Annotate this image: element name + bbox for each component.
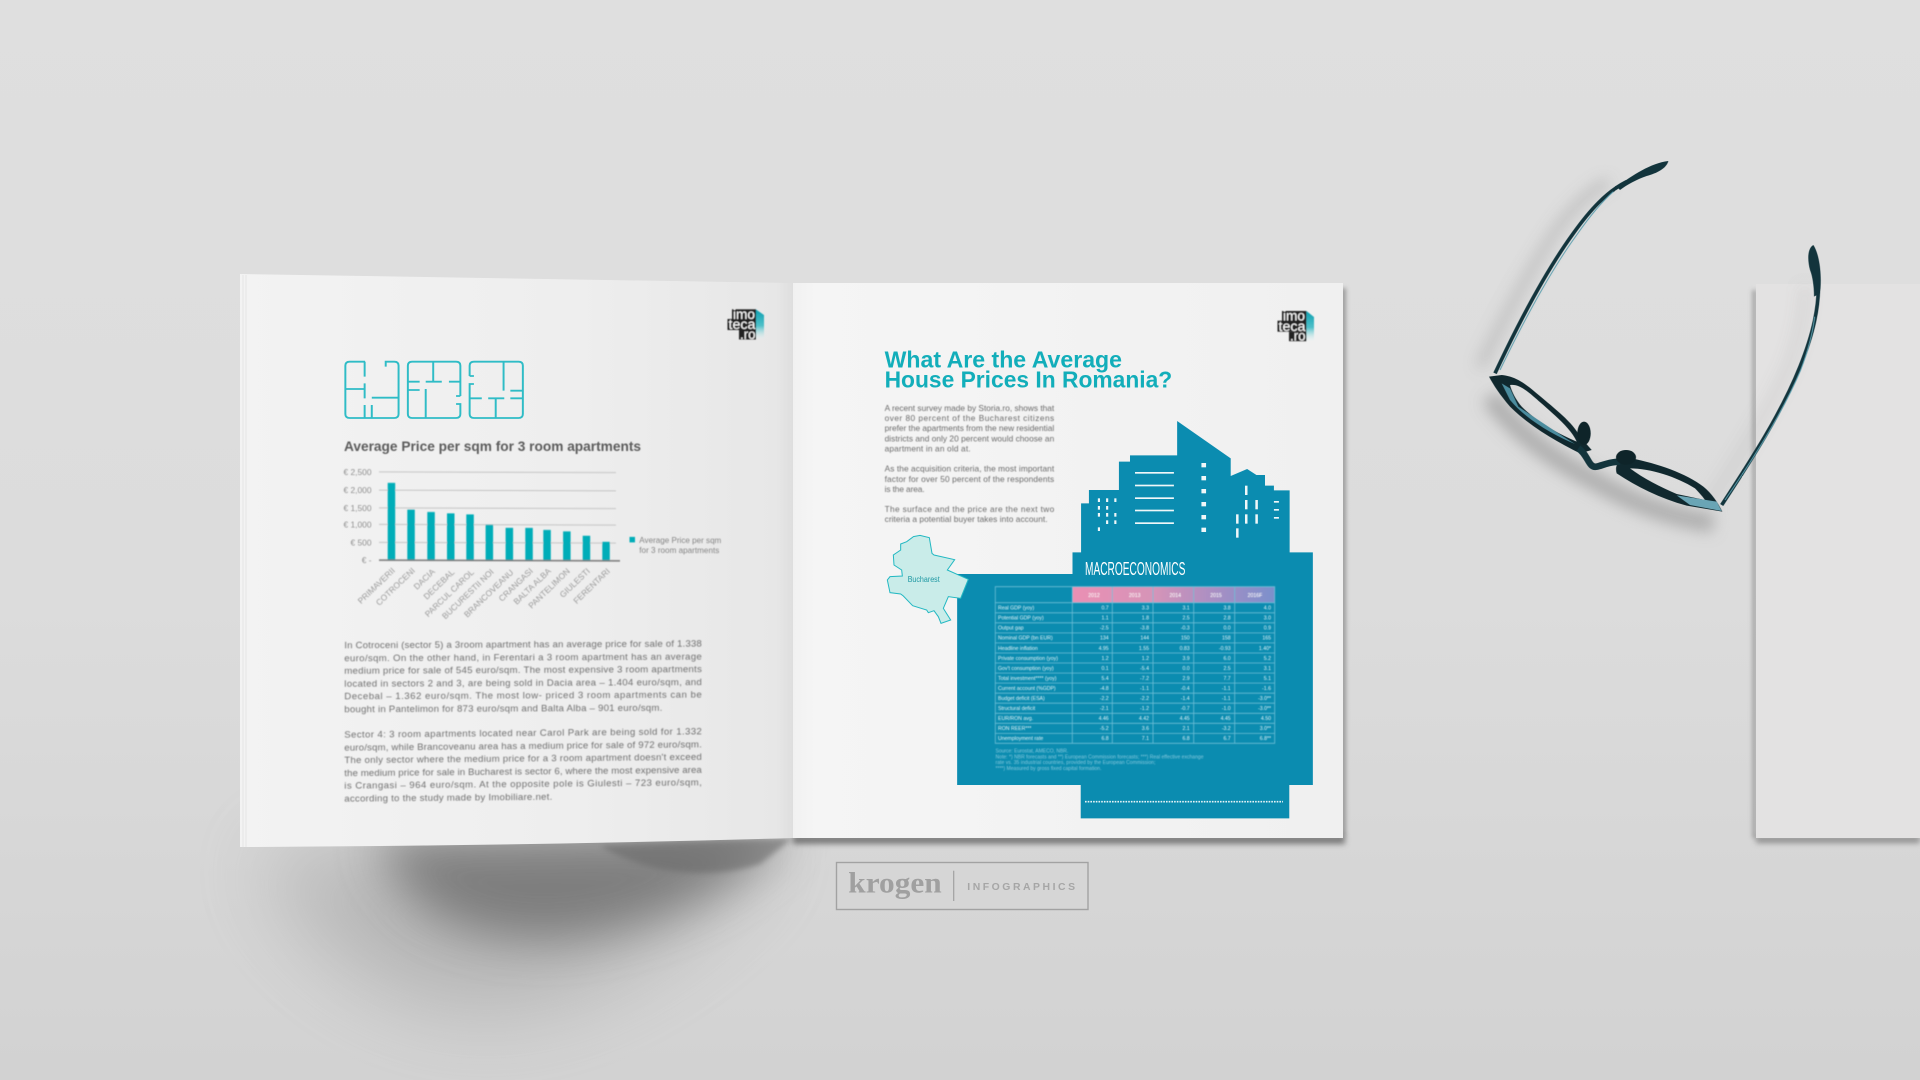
table: macroeconomic indicators: 3.0**	[1260, 726, 1271, 732]
table: macroeconomic indicators: -3.0**	[1258, 696, 1271, 702]
chart legend: for 3 room apartments	[639, 545, 719, 555]
logo: imoteca right: imo	[1283, 308, 1305, 324]
text block: survey intro: As the acquisition criteria, the most important	[885, 464, 1055, 474]
right temple	[1722, 245, 1821, 505]
table: macroeconomic indicators: 1.8	[1142, 616, 1149, 622]
logo: imoteca right: teca	[1278, 319, 1306, 334]
bar chart: average price per sqm: BRANCOVEANU	[462, 567, 515, 619]
table: macroeconomic indicators: 1.40*	[1259, 646, 1271, 652]
table: macroeconomic indicators: -0.7	[1181, 706, 1190, 712]
right lens frame	[1616, 458, 1722, 512]
text block: survey intro: apartment in an old at.	[885, 443, 971, 453]
table: macroeconomic indicators: Nominal GDP (bn EUR)	[998, 636, 1053, 642]
bar chart: average price per sqm: € 500	[351, 537, 372, 548]
bar chart: average price per sqm: DECEBAL	[421, 567, 457, 601]
text block: Cotroceni paragraph: bought in Pantelimon for 873 euro/sqm and Balta Alba – 901 euro/sqm.	[344, 703, 662, 715]
table: macroeconomic indicators: 1.1	[1101, 616, 1109, 622]
table notes: Source: Eurostat, AMECO, NBR.	[996, 748, 1068, 754]
text block: Sector 4 paragraph: euro/sqm, while Brancoveanu area has a medium price for sale of 972 euro/sqm.	[344, 739, 702, 753]
table: macroeconomic indicators: 4.50	[1261, 716, 1271, 722]
table: macroeconomic indicators: -3.2	[1222, 726, 1231, 732]
text block: survey intro: over 80 percent of the Bucharest citizens	[885, 413, 1054, 423]
table: macroeconomic indicators: Current account (%GDP)	[998, 686, 1056, 692]
table: macroeconomic indicators: 0.1	[1101, 666, 1109, 672]
table: macroeconomic indicators: Structural deficit	[998, 706, 1036, 712]
logo: imoteca left: .ro	[740, 327, 756, 342]
table: macroeconomic indicators: -0.93	[1219, 646, 1231, 652]
table: macroeconomic indicators: 7.7	[1223, 676, 1231, 682]
text block: Sector 4 paragraph: The only sector where the medium price for a 3 room apartment doesn't exceed	[344, 752, 702, 766]
logo: imoteca left: teca	[728, 317, 756, 332]
table: macroeconomic indicators: -1.0	[1222, 706, 1231, 712]
logo: imoteca left: imo	[733, 307, 755, 322]
text block: Sector 4 paragraph: Sector 4: 3 room apartments located near Carol Park are being sold for 1.332	[344, 726, 702, 741]
logo: imoteca right: .ro	[1290, 329, 1306, 344]
chart title: Average Price per sqm for 3 room apartments	[344, 438, 641, 454]
table: macroeconomic indicators: 0.83	[1180, 646, 1190, 652]
table: macroeconomic indicators: 150	[1181, 636, 1190, 642]
table notes: Note: *) NBR forecasts and **) European Commission forecasts; ***) Real effective exchange	[996, 754, 1204, 760]
table: macroeconomic indicators: -4.8	[1100, 686, 1109, 692]
logo: krogen infographics watermark	[836, 862, 1088, 910]
table: macroeconomic indicators: 6.0	[1223, 656, 1231, 662]
table: macroeconomic indicators: -2.1	[1100, 706, 1109, 712]
right lens highlight	[1677, 495, 1722, 511]
table: macroeconomic indicators: 2.8	[1223, 616, 1231, 622]
table: macroeconomic indicators: 0.7	[1101, 606, 1109, 612]
text block: Cotroceni paragraph: located in sectors 2 and 3, are being sold in Dacia area – 1.404 euro/sqm, and	[344, 677, 702, 690]
text block: Cotroceni paragraph: euro/sqm. On the other hand, in Ferentari a 3 room apartment has an average	[344, 651, 702, 664]
heading: macroeconomics: MACROECONOMICS	[1085, 559, 1185, 579]
bar chart: average price per sqm: € 2,000	[344, 485, 372, 495]
text block: Cotroceni paragraph: Decebal – 1.362 euro/sqm. The most low- priced 3 room apartments can be	[344, 690, 702, 702]
table: macroeconomic indicators: -1.6	[1262, 686, 1271, 692]
table: macroeconomic indicators: -1.1	[1222, 696, 1231, 702]
table: macroeconomic indicators: Headline inflation	[998, 646, 1038, 652]
bar chart: average price per sqm	[344, 467, 721, 622]
logo: imoteca left	[728, 307, 764, 342]
table: macroeconomic indicators: Potential GDP (yoy)	[998, 616, 1044, 622]
table: macroeconomic indicators	[995, 587, 1275, 743]
table: macroeconomic indicators: 6.7	[1223, 736, 1231, 742]
bar chart: average price per sqm: COTROCENI	[374, 565, 417, 608]
text block: survey intro: criteria a potential buyer takes into account.	[885, 514, 1048, 524]
table: macroeconomic indicators: 2.5	[1223, 666, 1231, 672]
table: macroeconomic indicators: Real GDP (yoy)	[998, 606, 1034, 612]
text block: Sector 4 paragraph: is Crangasi – 964 euro/sqm. At the opposite pole is Giulesti – 723 euro/sqm,	[344, 778, 702, 792]
bar chart: average price per sqm: BUCURESTII NOI	[440, 567, 496, 621]
text block: survey intro: A recent survey made by Storia.ro, shows that	[885, 403, 1055, 413]
table: macroeconomic indicators: 2014	[1170, 593, 1181, 599]
glasses shadow	[1480, 182, 1805, 523]
bar chart: average price per sqm: FERENTARI	[571, 566, 612, 606]
text block: survey intro: is the area.	[885, 484, 925, 494]
bar chart: average price per sqm: PANTELIMON	[526, 566, 572, 611]
text block: Sector 4 paragraph: the medium price for sale in Bucharest is sector 6, where the most expensive area	[344, 765, 702, 779]
logo: krogen infographics watermark: INFOGRAPHICS	[967, 882, 1075, 893]
book shadows	[260, 288, 1346, 1010]
table: macroeconomic indicators: -5.2	[1100, 726, 1109, 732]
table: macroeconomic indicators: 4.42	[1139, 716, 1149, 722]
chart legend	[630, 535, 721, 555]
table: macroeconomic indicators: 3.9	[1182, 656, 1190, 662]
table: macroeconomic indicators: -5.4	[1140, 666, 1149, 672]
bar chart: average price per sqm: BALTA ALBA	[511, 566, 553, 606]
panel: left page	[240, 274, 793, 847]
table: macroeconomic indicators: 3.0	[1264, 616, 1271, 622]
chart legend: Average Price per sqm	[639, 535, 721, 545]
table: macroeconomic indicators: -1.2	[1140, 706, 1149, 712]
table: macroeconomic indicators: Private consumption (yoy)	[998, 656, 1058, 662]
table: macroeconomic indicators: Unemployment rate	[998, 736, 1043, 742]
table: macroeconomic indicators: 3.6	[1142, 726, 1149, 732]
table: macroeconomic indicators: 3.3	[1142, 606, 1149, 612]
table: macroeconomic indicators: RON REER***	[998, 726, 1031, 732]
text block: survey intro: districts and only 20 percent would choose an	[885, 433, 1055, 443]
table: macroeconomic indicators: 2.5	[1182, 616, 1190, 622]
table: macroeconomic indicators: 2.1	[1182, 726, 1190, 732]
right partial next page	[1752, 284, 1920, 843]
icon: Bucharest map	[887, 535, 968, 623]
bar chart: average price per sqm: € 1,500	[344, 503, 372, 513]
table: macroeconomic indicators: 3.1	[1264, 666, 1271, 672]
table: macroeconomic indicators: 165	[1262, 636, 1271, 642]
table: macroeconomic indicators: -2.2	[1100, 696, 1109, 702]
icon: Bucharest map: Bucharest	[908, 575, 940, 584]
table: macroeconomic indicators: -1.1	[1140, 686, 1149, 692]
table: macroeconomic indicators: 5.4	[1101, 676, 1109, 682]
table: macroeconomic indicators: -2.2	[1140, 696, 1149, 702]
table: macroeconomic indicators: 7.1	[1142, 736, 1149, 742]
table: macroeconomic indicators: 144	[1140, 636, 1149, 642]
table: macroeconomic indicators: -2.5	[1100, 626, 1109, 632]
table: macroeconomic indicators: 0.9	[1264, 626, 1271, 632]
text block: survey intro: factor for over 50 percent of the respondents	[885, 474, 1054, 484]
table: macroeconomic indicators: 4.95	[1099, 646, 1109, 652]
table: macroeconomic indicators: 5.1	[1264, 676, 1271, 682]
table: macroeconomic indicators: 1.55	[1139, 646, 1149, 652]
bar chart: average price per sqm: GIULESTI	[557, 566, 592, 600]
table: macroeconomic indicators: -1.4	[1181, 696, 1190, 702]
table notes: ****) Measured by gross fixed capital formation.	[996, 766, 1102, 772]
illustration: blue city skyline panel	[957, 421, 1313, 818]
logo: krogen infographics watermark: krogen	[848, 867, 942, 900]
table: macroeconomic indicators: 1.2	[1142, 656, 1149, 662]
table: macroeconomic indicators: 5.2	[1264, 656, 1271, 662]
bar chart: average price per sqm: € 1,000	[344, 519, 372, 530]
table: macroeconomic indicators: Output gap	[998, 626, 1024, 632]
left temple	[1495, 161, 1668, 373]
bridge and nose pads	[1577, 422, 1636, 467]
table: macroeconomic indicators: 1.2	[1101, 656, 1109, 662]
table: macroeconomic indicators: -0.3	[1181, 626, 1190, 632]
table: macroeconomic indicators: Budget deficit (ESA)	[998, 696, 1045, 702]
table: macroeconomic indicators: 4.45	[1180, 716, 1190, 722]
text block: Cotroceni paragraph: In Cotroceni (sector 5) a 3room apartment has an average price for sale of 1.338	[344, 639, 702, 651]
table: macroeconomic indicators: Total investment**** (yoy)	[998, 676, 1057, 682]
table: macroeconomic indicators: 0.0	[1182, 666, 1190, 672]
table: macroeconomic indicators: 4.45	[1221, 716, 1231, 722]
title	[885, 346, 1172, 392]
bar chart: average price per sqm: € 2,500	[344, 467, 372, 477]
table: macroeconomic indicators: -3.0**	[1258, 706, 1271, 712]
table: macroeconomic indicators: -1.1	[1222, 686, 1231, 692]
panel: right page	[793, 283, 1343, 838]
table: macroeconomic indicators: 0.0	[1223, 626, 1231, 632]
table: macroeconomic indicators: -7.2	[1140, 676, 1149, 682]
table: macroeconomic indicators: -3.8	[1140, 626, 1149, 632]
left lens frame	[1489, 375, 1592, 453]
bar chart: average price per sqm: PARCUL CAROL	[423, 567, 476, 619]
table: macroeconomic indicators: 6.8**	[1260, 736, 1271, 742]
text block: survey intro: prefer the apartments from the new residential	[885, 423, 1054, 433]
table notes: rate vs. 35 industrial countries, provided by the European Commission;	[996, 760, 1156, 766]
table: macroeconomic indicators: EUR/RON avg.	[998, 716, 1033, 722]
text block: Cotroceni paragraph: medium price for sale of 545 euro/sqm. The most expensive 3 room apartments	[344, 664, 702, 677]
table: macroeconomic indicators: Gov't consumption (yoy)	[998, 666, 1054, 672]
title: House Prices In Romania?	[885, 366, 1172, 392]
bar chart: average price per sqm: € -	[362, 555, 372, 565]
bar chart: average price per sqm: CRANGASI	[496, 566, 535, 603]
table: macroeconomic indicators: 3.8	[1223, 606, 1231, 612]
illustration: glasses	[1480, 161, 1821, 523]
bar chart: average price per sqm: PRIMAVERII	[356, 565, 397, 606]
left lens highlight	[1502, 383, 1575, 444]
logo: imoteca right	[1278, 308, 1314, 344]
text block: Sector 4 paragraph	[344, 726, 702, 805]
icon: three floor plans	[345, 362, 523, 418]
title: What Are the Average	[885, 346, 1122, 372]
text block: survey intro	[885, 403, 1055, 524]
text block: survey intro: The surface and the price are the next two	[885, 504, 1055, 514]
dotted line at foot of skyline panel	[1085, 801, 1283, 803]
table: macroeconomic indicators: 6.8	[1101, 736, 1109, 742]
table: macroeconomic indicators: 2016F	[1248, 593, 1262, 599]
table: macroeconomic indicators: 4.46	[1099, 716, 1109, 722]
table notes	[996, 748, 1204, 772]
text block: Sector 4 paragraph: according to the study made by Imobiliare.net.	[344, 792, 552, 805]
table: macroeconomic indicators: 2.9	[1182, 676, 1190, 682]
table: macroeconomic indicators: 2013	[1129, 593, 1141, 599]
table: macroeconomic indicators: 2015	[1210, 593, 1222, 599]
table: macroeconomic indicators: 4.0	[1264, 606, 1271, 612]
table: macroeconomic indicators: 6.8	[1182, 736, 1190, 742]
table: macroeconomic indicators: 158	[1222, 636, 1231, 642]
table: macroeconomic indicators: 134	[1100, 636, 1109, 642]
table: macroeconomic indicators: 3.1	[1182, 606, 1190, 612]
text block: Cotroceni paragraph	[344, 639, 702, 715]
table: macroeconomic indicators: 2012	[1088, 593, 1100, 599]
table: macroeconomic indicators: -0.4	[1181, 686, 1190, 692]
bar chart: average price per sqm: DACIA	[411, 566, 437, 592]
